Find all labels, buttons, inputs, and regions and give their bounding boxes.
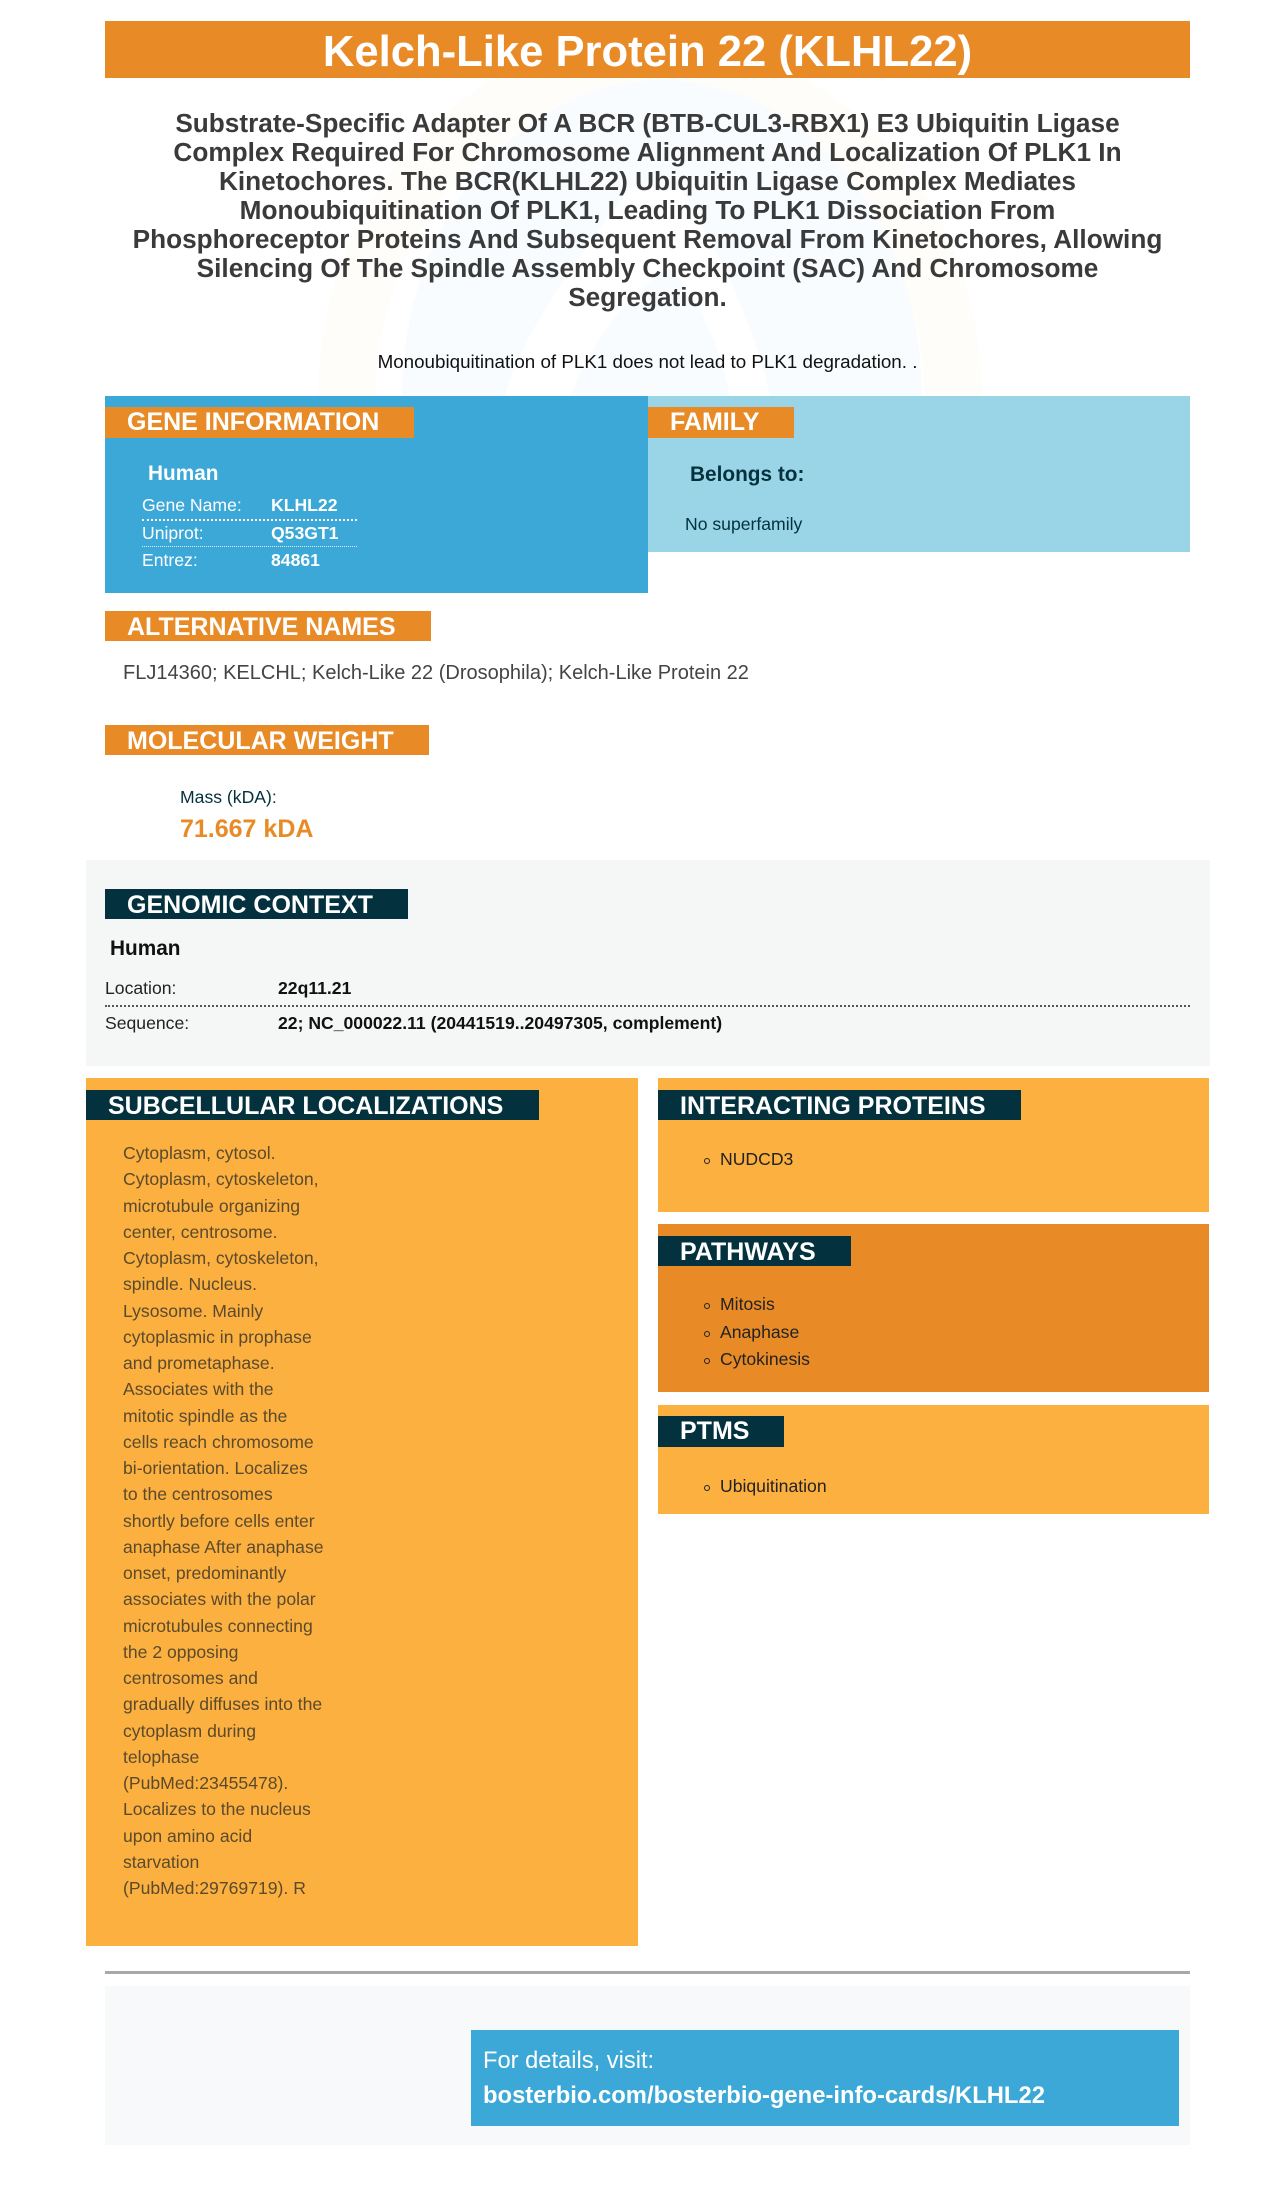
gene name row: KLHL22 <box>271 495 337 515</box>
heading: genomic context: GENOMIC CONTEXT <box>127 891 373 919</box>
pathway list: Mitosis <box>720 1294 775 1314</box>
subtitle description <box>133 108 1162 312</box>
localization text: Cytoplasm, cytoskeleton, <box>123 1248 319 1268</box>
ptm list: Ubiquitination <box>720 1476 827 1496</box>
localization text: Localizes to the nucleus <box>123 1799 311 1819</box>
function note: Monoubiquitination of PLK1 does not lead to PLK1 degradation. . <box>378 351 917 372</box>
details url: bosterbio.com/bosterbio-gene-info-cards/KLHL22 <box>483 2082 1045 2109</box>
heading: alternative names: ALTERNATIVE NAMES <box>127 613 396 641</box>
title: Kelch-Like Protein 22 (KLHL22) <box>323 28 972 76</box>
heading: pathways: PATHWAYS <box>680 1238 816 1266</box>
subtitle description: Segregation. <box>568 282 727 312</box>
localization text: associates with the polar <box>123 1589 316 1609</box>
pathway list <box>704 1294 810 1369</box>
localization text: Cytoplasm, cytosol. <box>123 1143 276 1163</box>
watermark logo <box>300 78 1000 396</box>
entrez row: 84861 <box>271 550 320 570</box>
heading: gene information: GENE INFORMATION <box>127 408 379 436</box>
subtitle description: Complex Required For Chromosome Alignment And Localization Of PLK1 In <box>173 137 1122 167</box>
heading: interacting proteins: INTERACTING PROTEINS <box>680 1092 986 1120</box>
localization text: mitotic spindle as the <box>123 1406 287 1426</box>
localization text: Lysosome. Mainly <box>123 1300 263 1320</box>
sequence row: 22; NC_000022.11 (20441519..20497305, complement) <box>278 1013 722 1033</box>
mass label: Mass (kDA): <box>180 787 277 807</box>
localization text: bi-orientation. Localizes <box>123 1458 308 1478</box>
sequence row: Sequence: <box>105 1013 189 1033</box>
localization text: cytoplasmic in prophase <box>123 1327 312 1347</box>
localization text: and prometaphase. <box>123 1353 275 1373</box>
localization text: (PubMed:23455478). <box>123 1773 288 1793</box>
location row: Location: <box>105 978 176 998</box>
pathway list: Cytokinesis <box>720 1349 810 1369</box>
localization text: cells reach chromosome <box>123 1432 314 1452</box>
subtitle description: Substrate-Specific Adapter Of A BCR (BTB-CUL3-RBX1) E3 Ubiquitin Ligase <box>175 108 1120 138</box>
details label: For details, visit: <box>483 2048 654 2074</box>
gene name row: Gene Name: <box>142 495 242 515</box>
panel: genomic context <box>86 860 1210 1066</box>
subtitle description: Phosphoreceptor Proteins And Subsequent Removal From Kinetochores, Allowing <box>133 224 1162 254</box>
panel: gene information <box>105 396 648 593</box>
species label: Human <box>148 462 218 485</box>
localization text: microtubules connecting <box>123 1616 313 1636</box>
localization text: Associates with the <box>123 1379 274 1399</box>
protein list: NUDCD3 <box>720 1149 793 1169</box>
localization text: center, centrosome. <box>123 1222 278 1242</box>
heading: ptms: PTMS <box>680 1417 749 1445</box>
callout: details link <box>471 2030 1179 2126</box>
pathway list: Anaphase <box>720 1322 799 1342</box>
species label: Human <box>110 937 180 960</box>
localization text: (PubMed:29769719). R <box>123 1878 306 1898</box>
uniprot row <box>142 522 357 547</box>
entrez row: Entrez: <box>142 550 198 570</box>
subtitle description: Kinetochores. The BCR(KLHL22) Ubiquitin Ligase Complex Mediates <box>219 166 1076 196</box>
location row: 22q11.21 <box>278 978 351 998</box>
localization text: Cytoplasm, cytoskeleton, <box>123 1169 319 1189</box>
belongs to label: Belongs to: <box>690 463 804 486</box>
uniprot row: Q53GT1 <box>271 523 338 543</box>
subtitle description: Silencing Of The Spindle Assembly Checkpoint (SAC) And Chromosome <box>197 253 1098 283</box>
alternative names text: FLJ14360; KELCHL; Kelch-Like 22 (Drosophila); Kelch-Like Protein 22 <box>123 662 749 684</box>
uniprot row: Uniprot: <box>142 523 204 543</box>
entrez row <box>142 550 320 570</box>
panel: ptms <box>658 1405 1209 1514</box>
gene name row <box>142 494 357 521</box>
heading: molecular weight: MOLECULAR WEIGHT <box>127 727 394 755</box>
localization text: to the centrosomes <box>123 1484 273 1504</box>
localization text: shortly before cells enter <box>123 1510 315 1530</box>
localization text: gradually diffuses into the <box>123 1694 322 1714</box>
localization text: spindle. Nucleus. <box>123 1274 257 1294</box>
panel: subcellular localizations <box>86 1078 638 1946</box>
title <box>105 21 1190 78</box>
heading: family: FAMILY <box>670 408 759 436</box>
localization text: starvation <box>123 1852 199 1872</box>
localization text: onset, predominantly <box>123 1563 286 1583</box>
localization text: the 2 opposing <box>123 1642 238 1662</box>
panel: family <box>648 396 1190 552</box>
mass value: 71.667 kDA <box>180 815 313 843</box>
localization text: centrosomes and <box>123 1668 258 1688</box>
heading: pathways <box>658 1236 851 1266</box>
localization text: cytoplasm during <box>123 1720 256 1740</box>
heading: family <box>648 407 794 438</box>
panel: footer <box>105 1986 1190 2145</box>
localization text: microtubule organizing <box>123 1196 300 1216</box>
panel: interacting proteins <box>658 1078 1209 1212</box>
localization text: telophase <box>123 1747 199 1767</box>
subtitle description: Monoubiquitination Of PLK1, Leading To PLK1 Dissociation From <box>240 195 1055 225</box>
localization text: anaphase After anaphase <box>123 1537 324 1557</box>
localization text: upon amino acid <box>123 1826 252 1846</box>
superfamily text: No superfamily <box>685 514 802 534</box>
panel: pathways <box>658 1224 1209 1392</box>
location row <box>105 977 1190 1007</box>
heading: subcellular localizations: SUBCELLULAR LOCALIZATIONS <box>108 1092 503 1120</box>
heading: ptms <box>658 1416 784 1447</box>
localization text <box>123 1143 324 1898</box>
